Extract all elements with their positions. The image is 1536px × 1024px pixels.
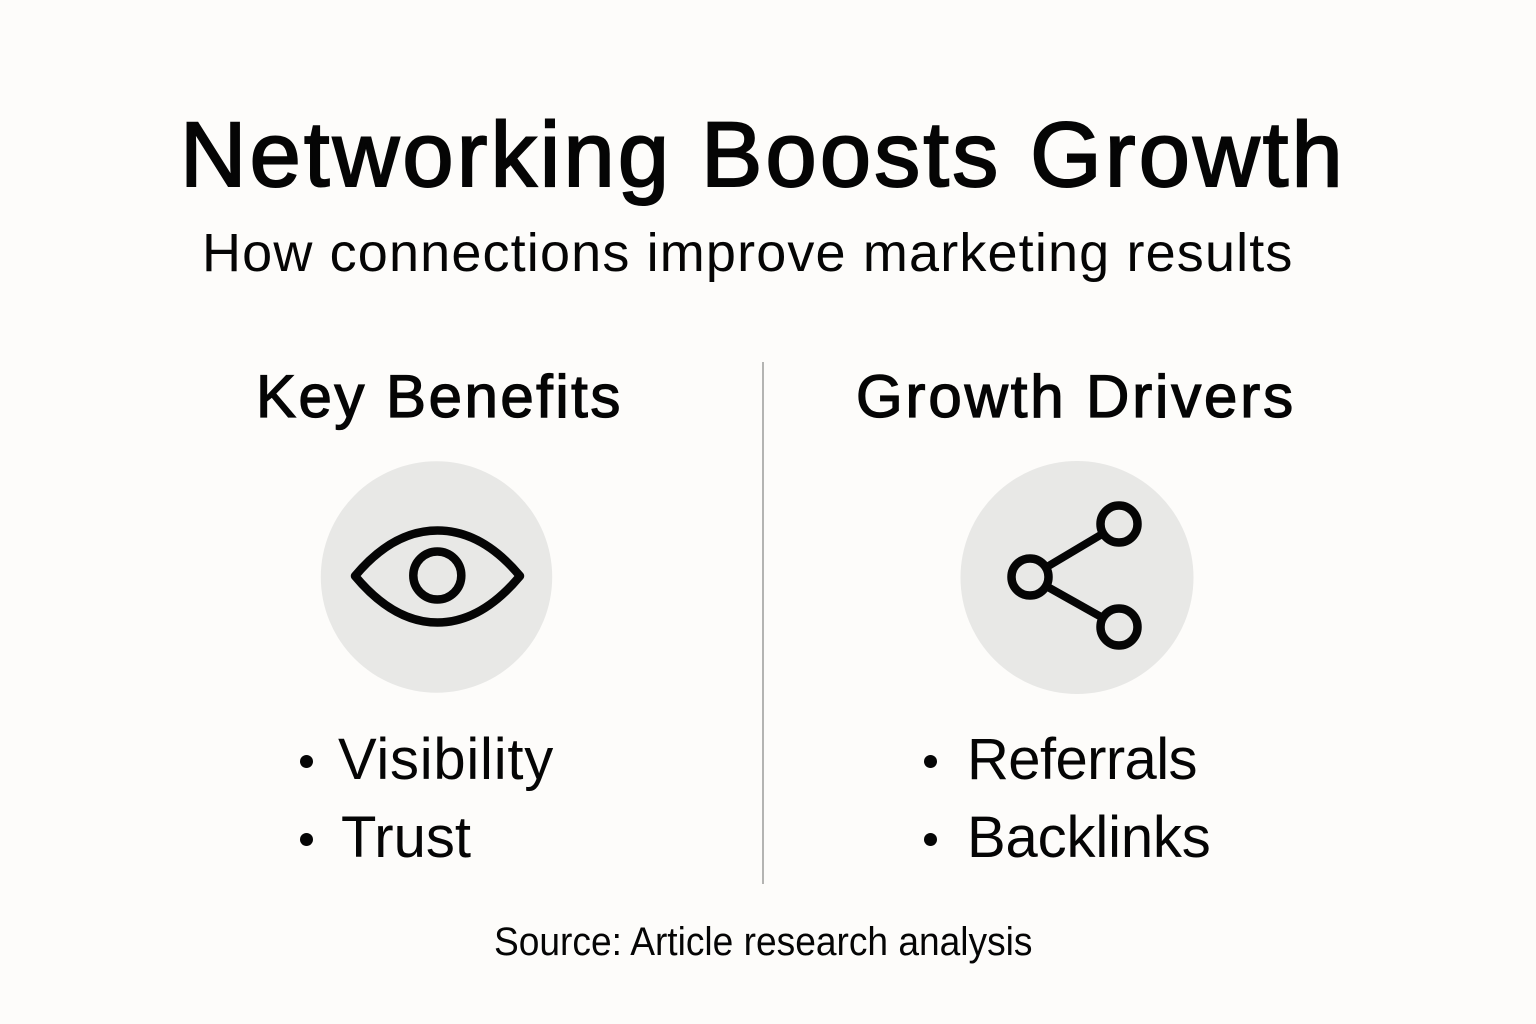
panel: key benefits: [256, 363, 623, 870]
title: Networking Boosts Growth: [180, 104, 1346, 206]
heading: growth drivers: Growth Drivers: [856, 363, 1296, 430]
list item: backlinks: Backlinks: [967, 805, 1211, 870]
icon: share network: [960, 461, 1194, 694]
divider: [762, 362, 764, 884]
list item: trust: Trust: [341, 805, 471, 870]
list item: referrals: Referrals: [967, 727, 1197, 792]
list item: visibility: Visibility: [338, 727, 554, 792]
subtitle: How connections improve marketing results: [202, 223, 1294, 283]
panel: growth drivers: [856, 363, 1296, 870]
icon: eye: [321, 461, 552, 693]
heading: key benefits: Key Benefits: [256, 363, 623, 430]
source note: Source: Article research analysis: [494, 920, 1032, 964]
